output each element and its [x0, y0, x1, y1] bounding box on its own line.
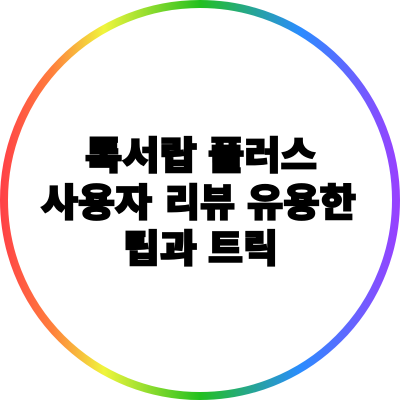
title line 1: 톡서랍	[85, 136, 197, 178]
title line 3: 팁과	[123, 229, 197, 271]
title line 3	[123, 229, 278, 271]
title line 2	[41, 183, 356, 225]
title line 2: 유용한	[247, 183, 356, 225]
title line 2: 사용자	[41, 183, 152, 225]
title line 1: 플러스	[208, 136, 317, 178]
title line 1	[85, 136, 317, 178]
title line 3: 트릭	[208, 229, 278, 271]
title	[41, 136, 356, 271]
title line 2: 리뷰	[165, 183, 235, 225]
